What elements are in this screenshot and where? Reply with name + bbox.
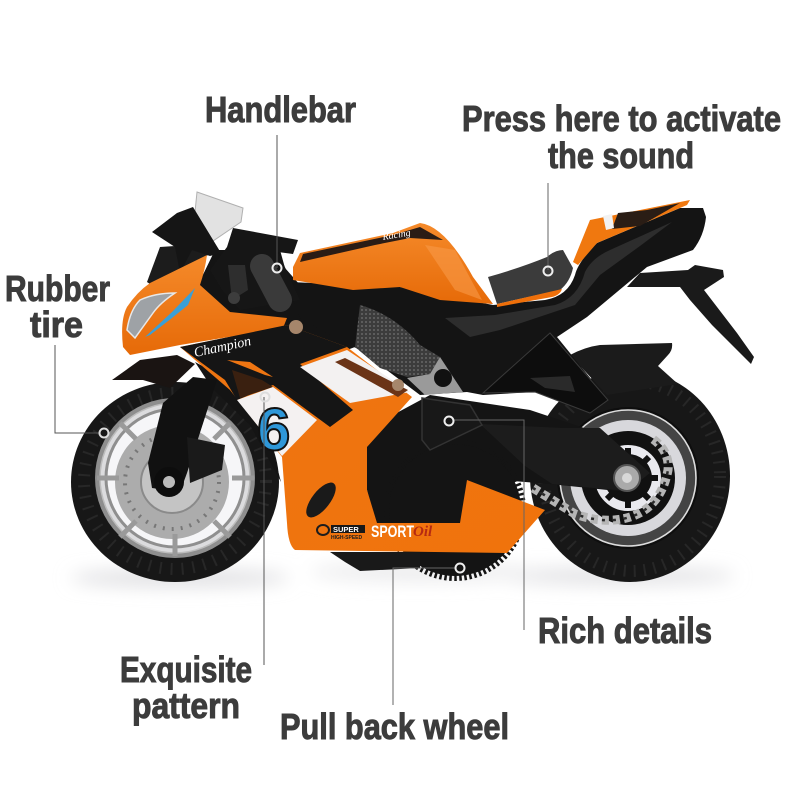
headlight housing [147, 246, 210, 284]
blue stripe [145, 288, 195, 337]
front fork [148, 377, 225, 497]
sport oil logo: SPORT [371, 522, 414, 541]
leader: rubber tire [55, 345, 108, 438]
lower fairing: SUPER [333, 525, 359, 534]
rear fender [570, 343, 678, 395]
leader: press here [544, 183, 552, 276]
tank script: Racing [381, 228, 411, 243]
label: rich details: Rich details [538, 610, 712, 651]
label: exquisite pattern [120, 649, 252, 726]
inner fender filler [195, 362, 281, 482]
label: rubber tire: Rubber [5, 268, 110, 309]
label: rubber tire [5, 268, 110, 345]
front wheel [71, 382, 279, 582]
seat [488, 250, 573, 304]
chain [533, 437, 668, 520]
label: press here to activate the sound [462, 98, 781, 176]
tank pad [355, 305, 440, 377]
leader: exquisite pattern [260, 392, 270, 665]
swing arm [480, 424, 650, 491]
fuel tank [293, 223, 493, 304]
engine [365, 395, 650, 525]
ground shadow [70, 564, 735, 586]
lower fairing: HIGH-SPEED [331, 535, 363, 541]
label: exquisite pattern: Exquisite [120, 649, 252, 690]
leader: pull back wheel [393, 564, 464, 705]
white side panel [300, 350, 410, 403]
headlight [127, 293, 175, 338]
lower fairing: Oil [413, 524, 433, 540]
pull back gear wheel [330, 442, 523, 578]
label: handlebar: Handlebar [205, 89, 356, 130]
handlebar [210, 228, 300, 310]
windshield [195, 192, 243, 241]
leader: rich details [444, 416, 524, 630]
motorcycle [71, 192, 754, 582]
black champion panel [180, 325, 353, 427]
label: press here to activate the sound: the sound [548, 135, 694, 176]
label: pull back wheel: Pull back wheel [280, 706, 509, 747]
black filler under tank and bars [198, 250, 360, 350]
rear suspension mount [422, 398, 482, 450]
license plate bracket [627, 265, 754, 364]
rear axle [614, 465, 640, 491]
tail [573, 200, 690, 265]
frame [290, 208, 706, 413]
leader: handlebar [272, 135, 282, 272]
lower fairing [180, 320, 545, 553]
lower fairing: 6 [257, 396, 290, 463]
label: exquisite pattern: pattern [132, 685, 240, 726]
number six panel [237, 387, 317, 456]
champion script: Champion [193, 334, 253, 361]
rear wheel [530, 370, 730, 582]
vent [301, 478, 341, 522]
upper fairing [122, 255, 287, 355]
mirror [152, 207, 221, 273]
super logo [317, 525, 329, 535]
label: rubber tire: tire [30, 304, 83, 345]
front fender [112, 355, 195, 388]
bracket [483, 333, 608, 413]
